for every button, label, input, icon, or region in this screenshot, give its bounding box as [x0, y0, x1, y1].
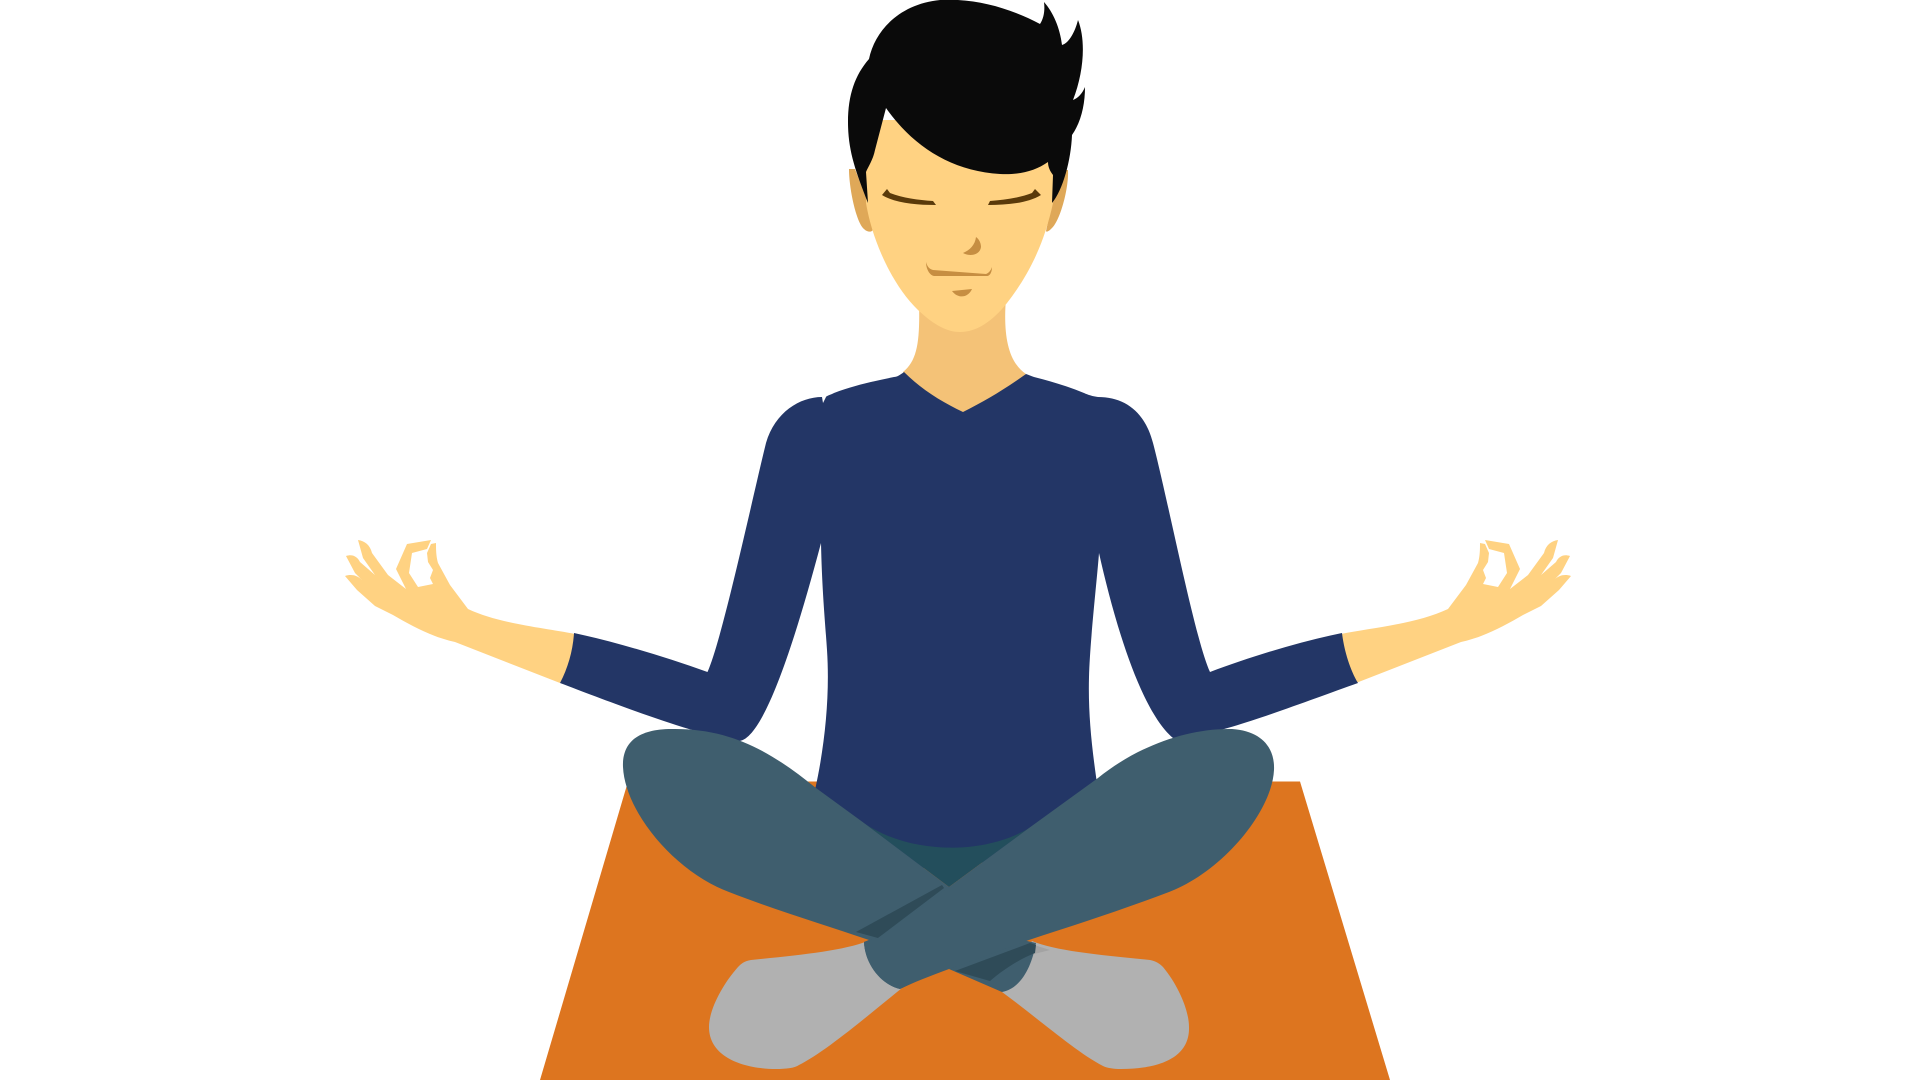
left foot — [709, 941, 902, 1069]
lower lip — [952, 289, 972, 296]
right hand and forearm — [1341, 540, 1571, 683]
rear ankle — [949, 935, 1036, 992]
right eye — [988, 189, 1041, 205]
foot shadow — [1034, 945, 1050, 954]
shirt — [560, 372, 1358, 870]
shirt hem shadow — [864, 823, 1029, 887]
left hand and forearm — [345, 540, 575, 683]
back leg — [623, 729, 960, 989]
neck — [903, 298, 1026, 425]
right ear — [1046, 170, 1068, 232]
rear ankle shadow — [955, 943, 1036, 981]
right foot — [1002, 941, 1189, 1069]
yoga mat — [540, 782, 1390, 1080]
hair — [848, 0, 1085, 203]
nose — [963, 237, 981, 255]
back leg shadow — [856, 885, 944, 938]
face — [866, 120, 1053, 332]
front leg — [864, 729, 1274, 989]
left ear — [849, 169, 873, 232]
left eye — [882, 189, 936, 205]
mouth — [926, 262, 992, 276]
